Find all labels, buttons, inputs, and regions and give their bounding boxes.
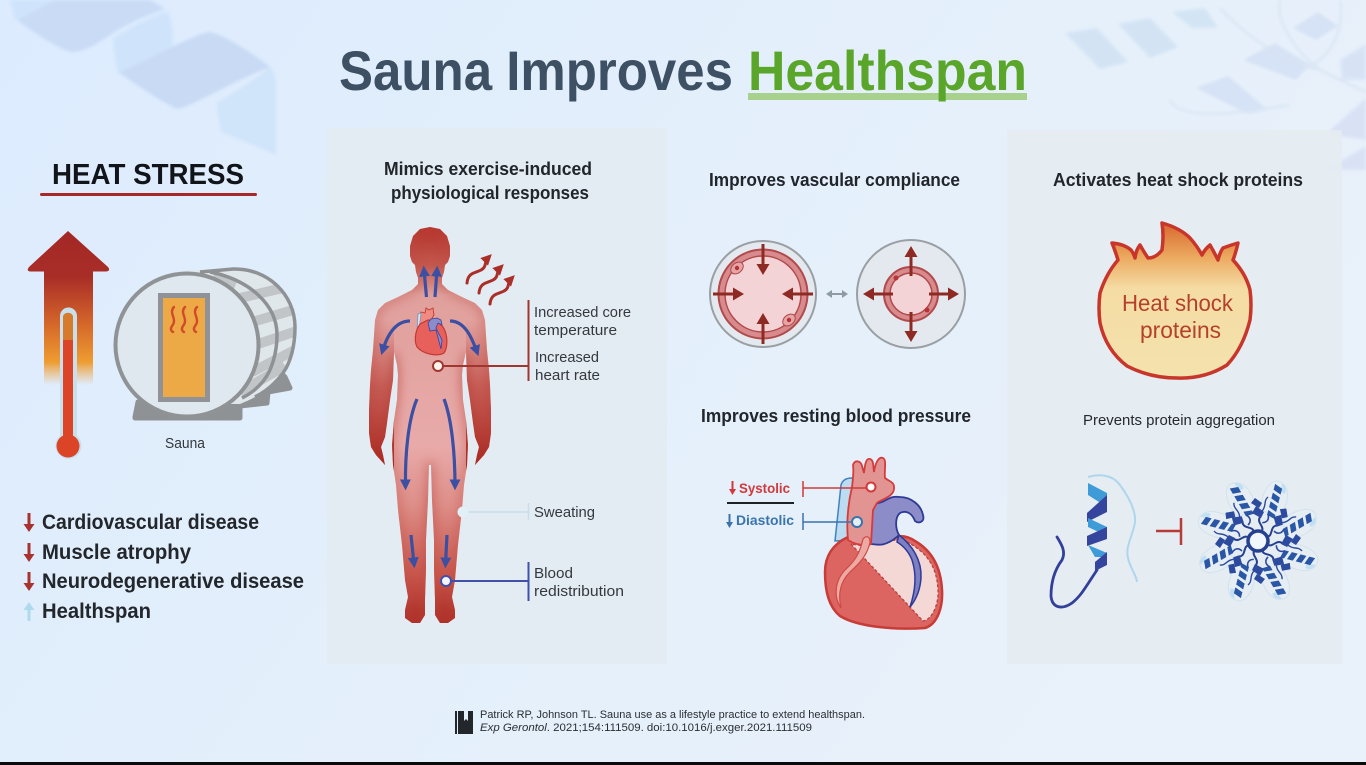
icon: inhibition symbol <box>1156 518 1181 545</box>
heading: heat shock proteins: Activates heat shock proteins <box>1053 170 1303 190</box>
aorta <box>847 458 894 545</box>
background protein right <box>1065 0 1366 170</box>
heading: resting blood pressure: Improves resting blood pressure <box>701 406 971 426</box>
heading: heat stress: HEAT STRESS <box>52 159 244 191</box>
label: sauna: Sauna <box>165 436 206 452</box>
background ribbon left <box>10 0 276 155</box>
list: health outcomes: Cardiovascular disease <box>42 511 259 534</box>
heading: mimics exercise <box>384 159 592 203</box>
callout: blood redistribution: Blood <box>534 565 573 582</box>
small heart <box>415 308 447 355</box>
callout: core temperature and heart rate <box>433 300 631 384</box>
callout: core temperature and heart rate: Increased <box>535 349 599 366</box>
light ventricle wedge <box>851 540 938 621</box>
callout: diastolic marker <box>803 513 862 530</box>
diagram: dilated vessel <box>710 241 816 347</box>
icon: flame with label: Heat shock <box>1122 290 1233 316</box>
icon: rising temperature arrow and thermometer <box>28 231 109 459</box>
pulmonary vein back <box>835 478 858 541</box>
citation <box>480 709 865 734</box>
blood flow arrows <box>382 270 477 564</box>
citation: Exp Gerontol. 2021;154:111509. doi:10.1016/j.exger.2021.111509 <box>480 722 812 734</box>
title <box>339 39 1027 102</box>
pulmonary artery <box>871 497 923 545</box>
panel: heat shock proteins <box>1007 130 1342 664</box>
callout: core temperature and heart rate: heart rate <box>535 367 600 384</box>
legend: systolic and diastolic: Diastolic <box>736 512 794 528</box>
legend: systolic and diastolic: Systolic <box>739 480 790 496</box>
panel: exercise responses <box>327 128 667 664</box>
callout: blood redistribution <box>441 562 624 601</box>
coronary branch <box>897 535 921 607</box>
callout: sweating <box>458 503 595 521</box>
illustration: human body <box>360 220 511 630</box>
bottom edge bar <box>0 762 1366 765</box>
icon: double arrow <box>826 290 848 298</box>
icon: book <box>455 711 473 734</box>
list: health outcomes: Muscle atrophy <box>42 541 191 564</box>
illustration: protein helix <box>1051 475 1137 607</box>
heading: mimics exercise: physiological responses <box>391 183 589 203</box>
illustration: heart <box>825 458 942 629</box>
heading: vascular compliance: Improves vascular compliance <box>709 170 960 190</box>
ventricle body <box>825 536 942 629</box>
icon: flame with label: proteins <box>1140 317 1221 343</box>
coronary artery <box>836 537 870 608</box>
list: health outcomes: Healthspan <box>42 600 151 623</box>
list: health outcomes <box>24 511 304 623</box>
heat waves <box>467 258 511 304</box>
label: prevents protein aggregation: Prevents protein aggregation <box>1083 412 1275 429</box>
heading: mimics exercise: Mimics exercise-induced <box>384 159 592 179</box>
diagram: constricted vessel <box>857 240 965 348</box>
callout: sweating: Sweating <box>534 504 595 521</box>
icon: flame with label <box>1099 223 1251 378</box>
icon: barrel sauna <box>116 260 300 418</box>
illustration: protein aggregate <box>1195 478 1321 604</box>
sauna feet <box>135 375 290 418</box>
title: Sauna Improves <box>339 39 733 102</box>
callout: core temperature and heart rate: temperature <box>534 322 617 339</box>
legend: systolic and diastolic <box>726 480 794 528</box>
body silhouette <box>369 227 491 623</box>
list: health outcomes: Neurodegenerative disease <box>42 570 304 593</box>
callout: core temperature and heart rate: Increased core <box>534 304 631 321</box>
citation: Patrick RP, Johnson TL. Sauna use as a lifestyle practice to extend healthspan. <box>480 709 865 721</box>
callout: systolic marker <box>803 481 876 497</box>
barrel body <box>180 270 294 404</box>
title: Healthspan <box>748 39 1027 102</box>
callout: blood redistribution: redistribution <box>534 583 624 600</box>
